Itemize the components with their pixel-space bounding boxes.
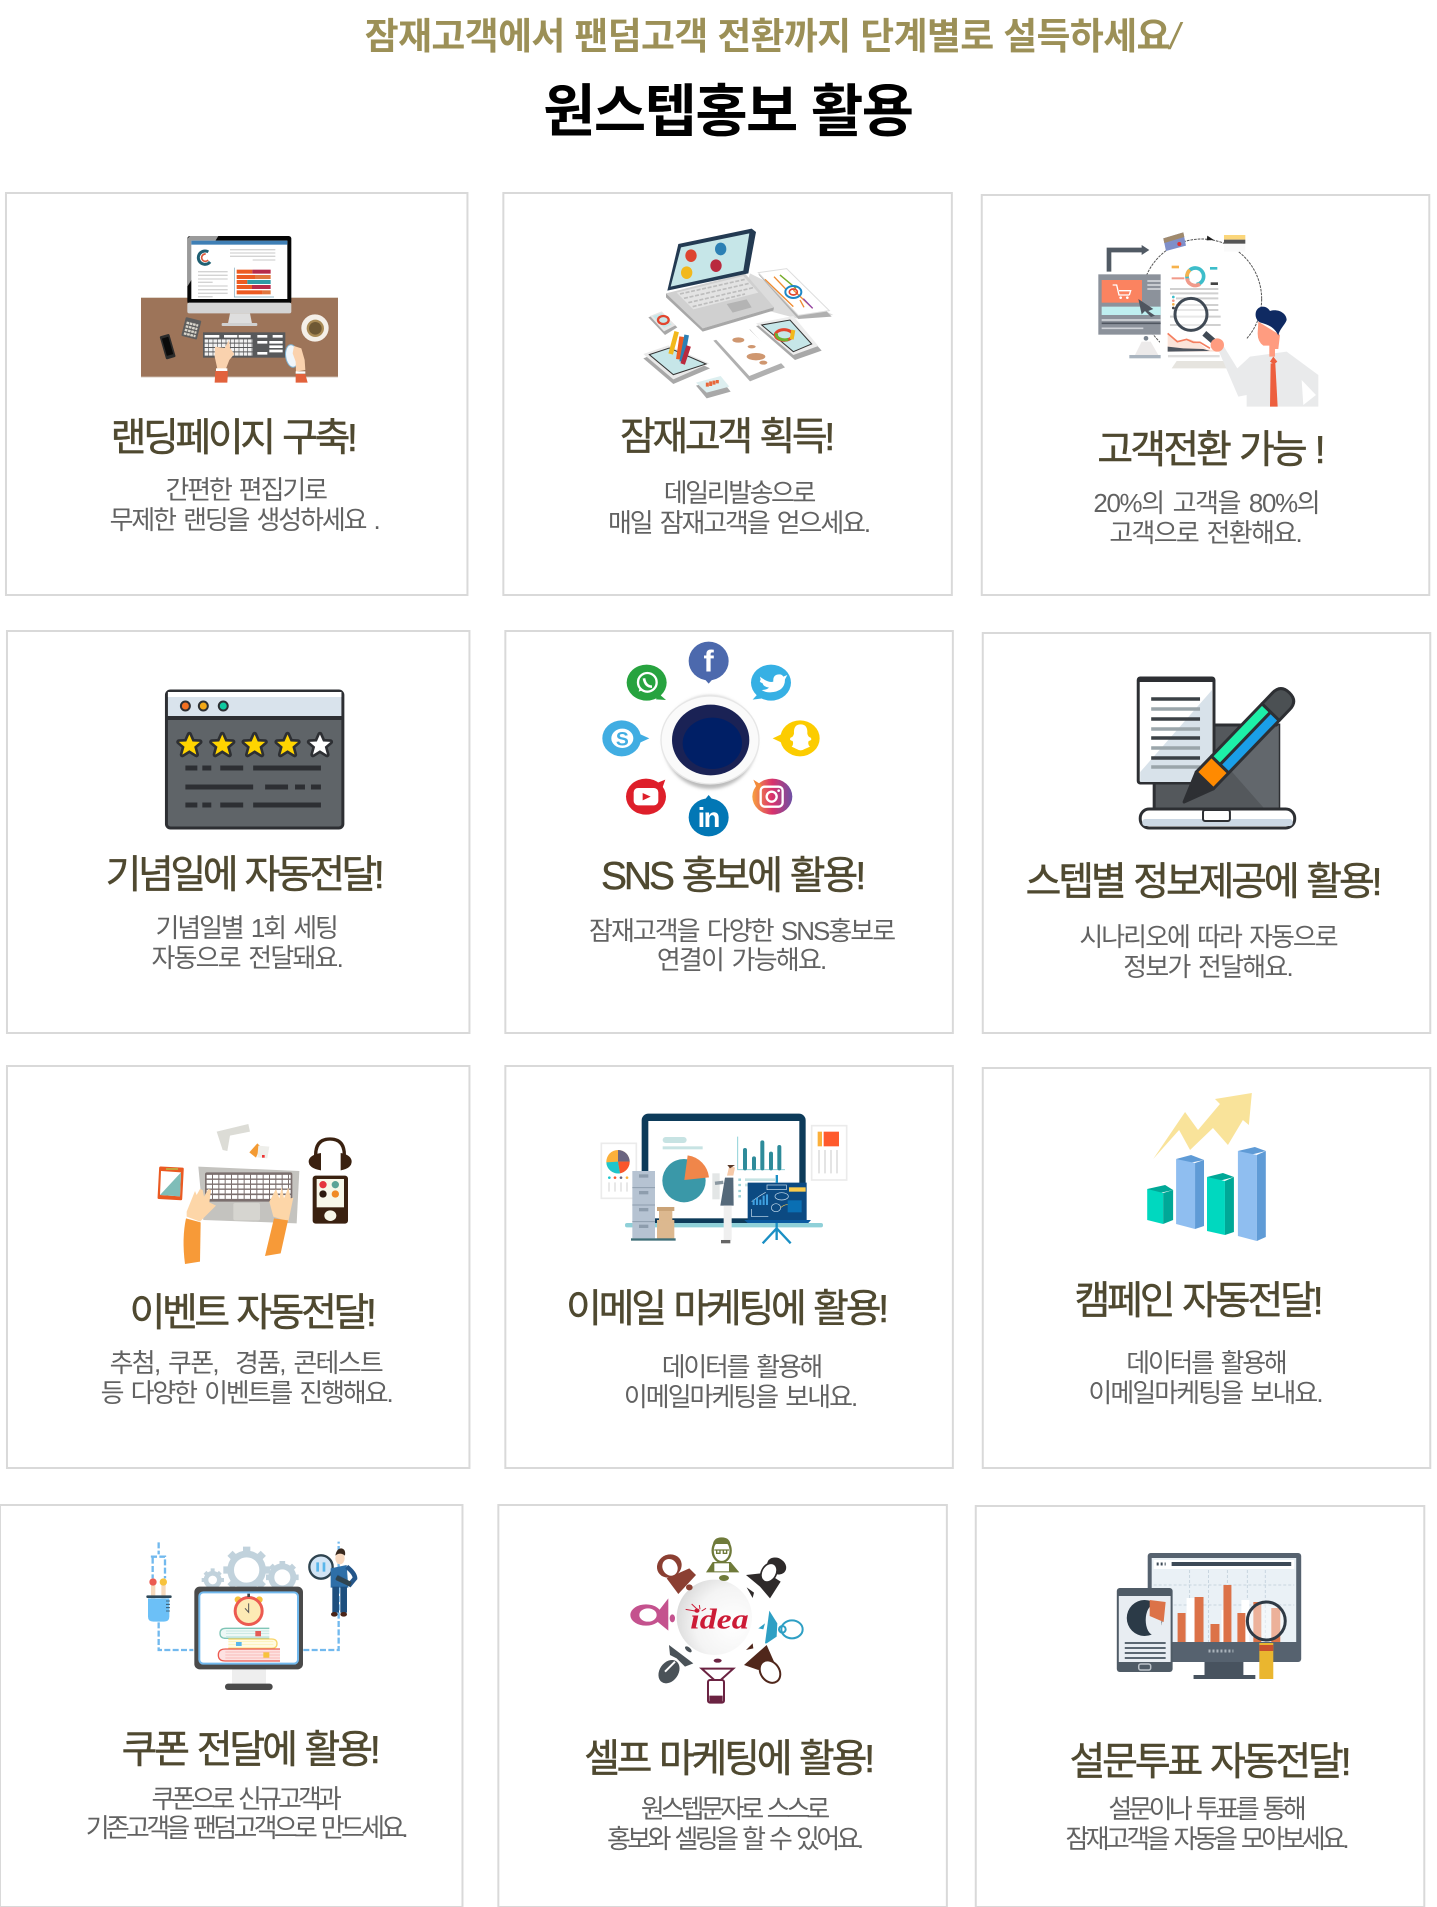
icon: social network bubbles [602, 642, 820, 836]
description: 추첨, 쿠폰, 경품, 콘테스트 [110, 1349, 384, 1378]
icon: analyst with magnifier [1098, 232, 1318, 407]
heading: 이벤트 자동전달! [130, 1292, 377, 1335]
panel: step information [983, 633, 1430, 1033]
description: 고객으로 전환해요. [1109, 519, 1303, 548]
description: 데일리발송으로 [664, 479, 816, 508]
description: 기념일별 1회 세팅 [155, 914, 339, 943]
panel: coupon [0, 1505, 462, 1907]
panel: survey [976, 1506, 1424, 1907]
heading: 고객전환 가능 ! [1097, 429, 1326, 472]
panel: email marketing [505, 1066, 953, 1468]
description: 이메일마케팅을 보내요. [624, 1383, 858, 1412]
description: 연결이 가능해요. [657, 946, 827, 975]
heading: 잠재고객 획득! [620, 416, 835, 459]
description [1088, 1349, 1324, 1408]
description: 원스텝문자로 스스로 [641, 1795, 830, 1824]
panel: self marketing [498, 1505, 947, 1907]
person lower right [744, 1643, 785, 1687]
word: idea: idea [690, 1604, 749, 1635]
description: 시나리오에 따라 자동으로 [1079, 923, 1339, 952]
icon: monitor, tablet and magnifier [1117, 1553, 1301, 1679]
description [151, 914, 344, 973]
icon: laptop and devices [643, 229, 833, 398]
person left [630, 1598, 675, 1631]
description: 기존고객을 팬덤고객으로 만드세요. [86, 1814, 409, 1843]
heading: 쿠폰 전달에 활용! [122, 1729, 381, 1772]
heading: 캠페인 자동전달! [1074, 1280, 1324, 1323]
panel: event [7, 1066, 469, 1468]
person top [706, 1537, 739, 1581]
icon: social network bubbles: S [616, 729, 629, 750]
icon: document and pencil on laptop [1138, 677, 1298, 828]
description: 설문이나 투표를 통해 [1108, 1795, 1307, 1824]
description [589, 917, 896, 975]
panel: anniversary [7, 631, 469, 1033]
panel: SNS [505, 631, 953, 1033]
person upper right [746, 1554, 789, 1598]
icon: social network bubbles: f [704, 645, 715, 679]
description: 데이터를 활용해 [1126, 1349, 1288, 1378]
description: 매일 잠재고객을 얻으세요. [608, 509, 871, 538]
heading: SNS 홍보에 활용! [601, 855, 866, 898]
panel: campaign [983, 1068, 1430, 1468]
description [1079, 923, 1339, 982]
panel: landing page [6, 193, 467, 595]
description [607, 1795, 864, 1854]
heading: 랜딩페이지 구축! [111, 417, 358, 460]
heading: 셀프 마케팅에 활용! [584, 1738, 875, 1781]
panel: customer conversion [982, 195, 1429, 595]
description: 이메일마케팅을 보내요. [1088, 1379, 1324, 1408]
person lower left [654, 1645, 693, 1687]
subtitle: 잠재고객에서 팬덤고객 전환까지 단계별로 설득하세요/ [365, 16, 1184, 57]
description: 쿠폰으로 신규고객과 [151, 1785, 342, 1814]
description [608, 479, 871, 538]
heading: 이메일 마케팅에 활용! [566, 1288, 889, 1331]
icon: presentation board [601, 1114, 847, 1243]
description: 20%의 고객을 80%의 [1093, 490, 1321, 518]
icon: idea circle of people [630, 1537, 803, 1703]
description [624, 1353, 858, 1412]
description: 무제한 랜딩을 생성하세요 . [110, 506, 381, 535]
description: 등 다양한 이벤트를 진행해요. [101, 1379, 394, 1408]
heading: 스텝별 정보제공에 활용! [1026, 861, 1382, 904]
description: 잠재고객을 다양한 SNS홍보로 [589, 917, 896, 946]
person upper left [653, 1550, 696, 1594]
description [1065, 1795, 1350, 1854]
heading: 설문투표 자동전달! [1069, 1741, 1352, 1784]
description [1093, 490, 1321, 548]
description [101, 1349, 394, 1408]
panel: lead acquisition [503, 193, 952, 595]
icon: rising bar chart [1147, 1093, 1266, 1241]
heading: 기념일에 자동전달! [106, 854, 385, 897]
icon: hands on laptop with music player [157, 1124, 352, 1264]
description: 잠재고객을 자동을 모아보세요. [1065, 1825, 1350, 1854]
description [86, 1785, 409, 1843]
icon: monitor with books and gears [146, 1542, 355, 1690]
main title: 원스텝홍보 활용 [543, 80, 914, 144]
icon: social network bubbles: in [698, 802, 720, 833]
description: 정보가 전달해요. [1123, 953, 1294, 982]
description [110, 476, 381, 535]
description: 간편한 편집기로 [165, 476, 328, 505]
description: 홍보와 셀링을 할 수 있어요. [607, 1825, 864, 1854]
description: 데이터를 활용해 [662, 1353, 823, 1382]
person right [758, 1611, 803, 1643]
person bottom [702, 1659, 733, 1703]
icon: review window [166, 691, 343, 828]
description: 자동으로 전달돼요. [151, 944, 344, 973]
icon: desk with computer [141, 236, 338, 383]
